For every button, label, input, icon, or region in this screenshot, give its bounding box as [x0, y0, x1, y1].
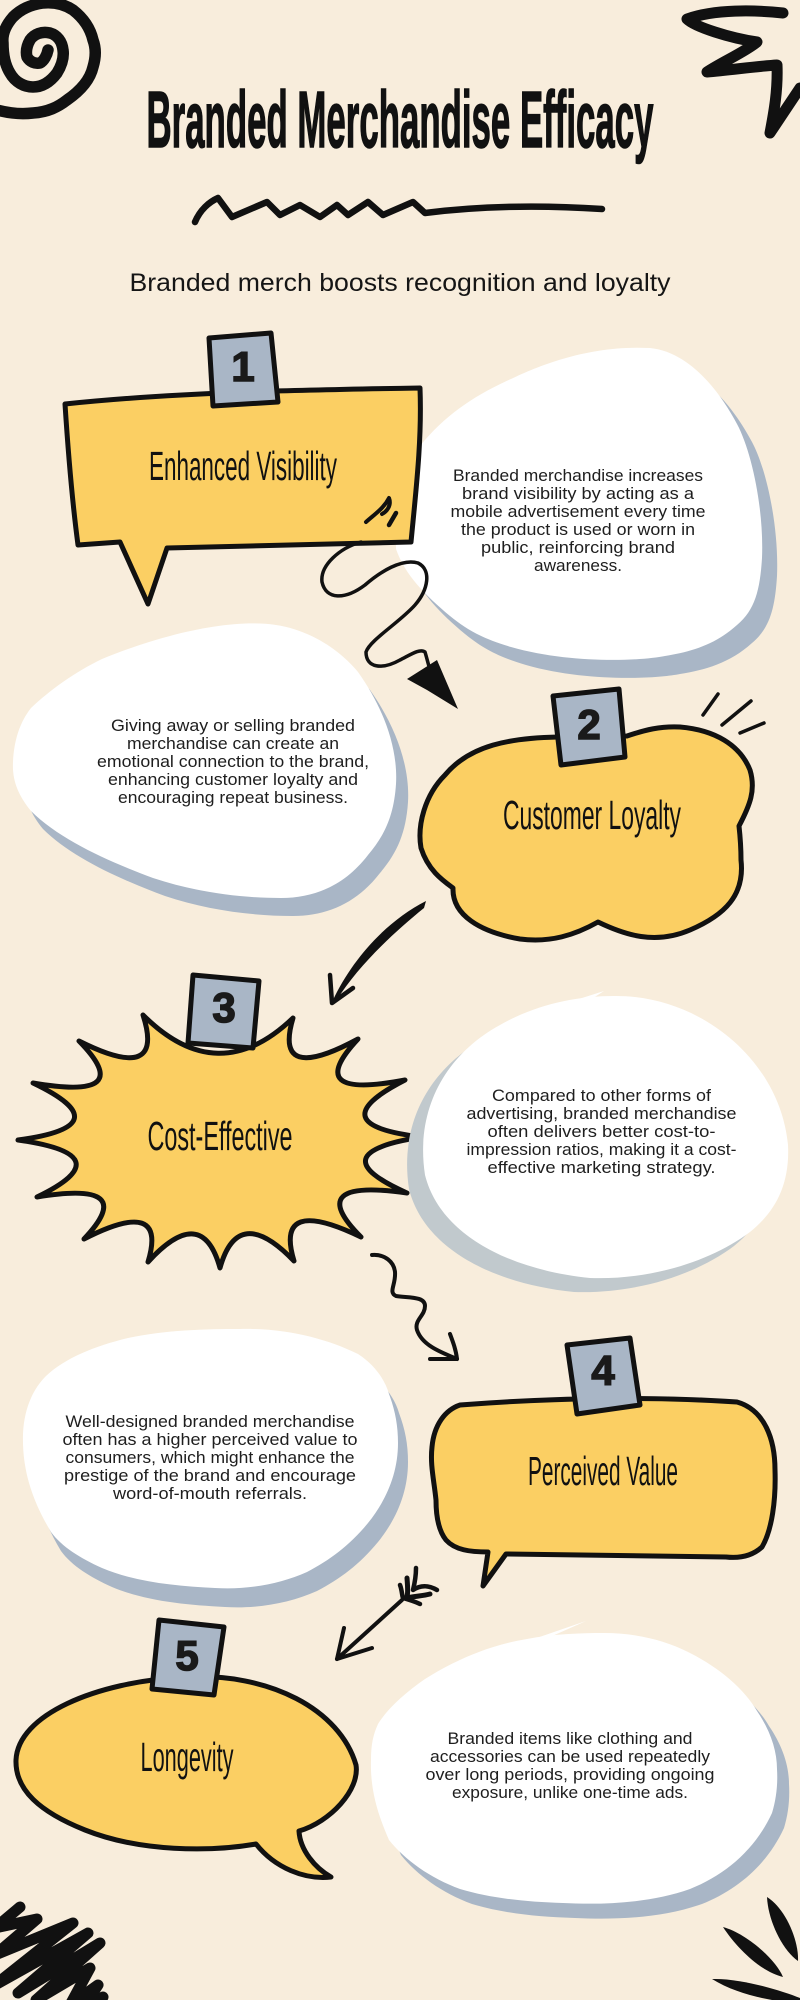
panel: description 1: the product is used or worn in — [461, 521, 695, 539]
panel: description 3: Compared to other forms of — [492, 1087, 711, 1105]
badge 5: 5 — [175, 1632, 199, 1679]
subtitle: Branded merch boosts recognition and loyalty — [130, 269, 671, 297]
panel: description 5: accessories can be used repeatedly — [430, 1748, 711, 1766]
panel: description 2: emotional connection to the brand, — [97, 753, 369, 771]
arrow: step 4 to step 5 — [337, 1568, 437, 1659]
badge 2 — [553, 689, 625, 765]
panel: description 5: Branded items like clothing and — [448, 1730, 692, 1748]
arrow: step 2 to step 3 — [330, 901, 426, 1003]
panel: description 4: consumers, which might enhance the — [66, 1449, 354, 1467]
panel: description 2: enhancing customer loyalty and — [108, 771, 358, 789]
panel: description 5 — [371, 1621, 789, 1919]
icon: leaf strokes bottom-right — [712, 1897, 800, 2000]
panel: description 4: often has a higher perceived value to — [62, 1431, 358, 1449]
panel: description 2: merchandise can create an — [127, 735, 339, 753]
panel: description 1: mobile advertisement every time — [450, 503, 706, 521]
panel: description 3 — [407, 991, 788, 1292]
icon: spiral top-left — [0, 3, 95, 114]
icon: zigzag top-right — [687, 11, 800, 133]
panel: description 4 — [23, 1329, 408, 1607]
badge 5 — [152, 1620, 224, 1695]
panel: description 2: encouraging repeat business. — [118, 789, 348, 807]
panel: description 5: exposure, unlike one-time ads. — [452, 1784, 688, 1802]
panel: description 3: advertising, branded merchandise — [466, 1105, 736, 1123]
badge 1 — [209, 333, 278, 406]
panel: description 2: Giving away or selling branded — [111, 717, 355, 735]
panel: description 3: impression ratios, making it a cost- — [466, 1141, 736, 1159]
panel: description 1: brand visibility by acting as a — [462, 485, 695, 503]
title underline squiggle — [195, 198, 602, 222]
panel: description 3: effective marketing strategy. — [488, 1159, 716, 1177]
badge 3 — [188, 975, 259, 1048]
panel: description 4: prestige of the brand and encourage — [64, 1467, 356, 1485]
panel: step 1 bubble — [65, 388, 420, 604]
icon: scribble bottom-left — [0, 1907, 103, 2000]
panel: step 5 speech bubble — [16, 1677, 356, 1877]
panel: description 3: often delivers better cost-to- — [488, 1123, 716, 1141]
panel: description 1: awareness. — [534, 557, 622, 575]
panel: step 1 bubble: Enhanced Visibility — [149, 443, 337, 489]
badge 3: 3 — [212, 984, 236, 1031]
badge 1: 1 — [231, 343, 255, 390]
panel: description 2 — [13, 623, 408, 916]
panel: step 3 starburst: Cost-Effective — [148, 1113, 292, 1159]
panel: step 5 speech bubble: Longevity — [140, 1734, 234, 1780]
panel: step 4 bubble — [431, 1398, 775, 1586]
arrow: step 1 to step 2 — [322, 542, 458, 709]
panel: step 2 cloud bubble — [420, 727, 752, 940]
panel: description 1: public, reinforcing brand — [481, 539, 675, 557]
panel: description 4: Well-designed branded merchandise — [66, 1413, 354, 1431]
arrow: step 3 to step 4 — [372, 1255, 457, 1359]
panel: description 1: Branded merchandise increases — [453, 467, 703, 485]
icon: emphasis rays — [703, 694, 764, 733]
panel: step 3 starburst — [18, 1015, 422, 1268]
panel: description 1 — [396, 348, 777, 678]
badge 2: 2 — [577, 701, 601, 748]
panel: description 4: word-of-mouth referrals. — [112, 1485, 307, 1503]
badge 4: 4 — [591, 1347, 615, 1394]
panel: description 5: over long periods, providing ongoing — [426, 1766, 714, 1784]
badge 4 — [567, 1338, 640, 1414]
